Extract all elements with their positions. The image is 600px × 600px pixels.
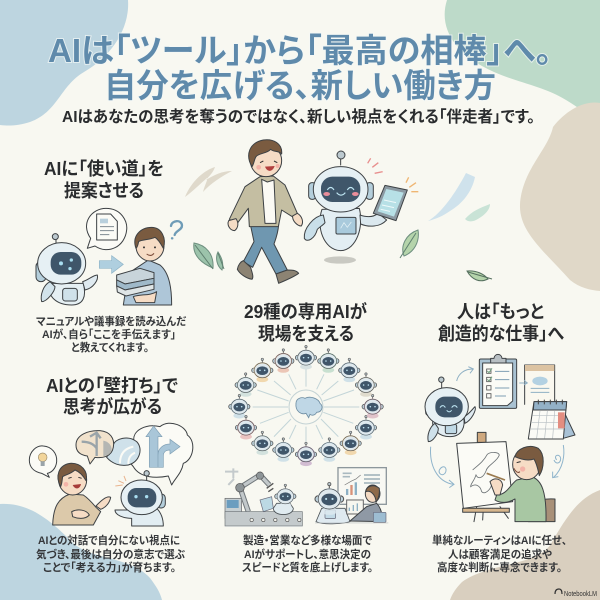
body text: 製造・営業など多様な場面で bbox=[243, 534, 372, 547]
hero: man walking with robot bbox=[228, 140, 418, 283]
man talking bbox=[53, 463, 111, 525]
leaf: left pair bbox=[194, 243, 224, 270]
speech bubble: document bbox=[87, 208, 127, 250]
heading bbox=[44, 159, 164, 201]
title: AIは「ツール」から「最高の相棒」へ。 bbox=[48, 32, 552, 69]
robot bbox=[425, 377, 475, 442]
heading: 提案させる bbox=[64, 180, 144, 201]
illustration bbox=[29, 423, 193, 526]
arrow bbox=[99, 256, 123, 273]
panel: 29 specialised AIs bbox=[225, 301, 388, 574]
calendar bbox=[528, 400, 575, 439]
body text bbox=[35, 315, 187, 354]
heading: AIに「使い道」を bbox=[44, 159, 164, 179]
hub and spoke diagram bbox=[229, 345, 383, 466]
window document bbox=[519, 365, 555, 404]
artist bbox=[487, 446, 555, 522]
blob: bottom right tan bbox=[450, 490, 600, 600]
panel: suggest uses bbox=[35, 159, 187, 354]
body text bbox=[242, 534, 373, 574]
heading: AIとの「壁打ち」で bbox=[46, 376, 178, 396]
brush stroke: blue bbox=[428, 173, 475, 221]
body text bbox=[36, 534, 185, 574]
body text: と教えてくれます。 bbox=[71, 341, 149, 354]
body text: AIが、自ら「ここを手伝えます」 bbox=[42, 328, 176, 341]
heading bbox=[438, 302, 564, 344]
illustration bbox=[225, 345, 388, 526]
body text: 高度な判断に専念できます。 bbox=[437, 561, 562, 574]
brush stroke: green bbox=[465, 204, 490, 221]
body text bbox=[432, 534, 567, 574]
panel: more creative work bbox=[425, 302, 575, 574]
panel: sounding board bbox=[29, 376, 193, 574]
thought cloud: diverging arrow bbox=[128, 423, 193, 485]
body text: スピードと質を底上げします。 bbox=[242, 561, 373, 574]
brush stroke: tan bbox=[185, 167, 232, 197]
illustration bbox=[425, 354, 575, 522]
heading bbox=[46, 376, 178, 417]
icon: question mark bbox=[171, 221, 182, 238]
body text: 単純なルーティンはAIに任せ、 bbox=[432, 534, 567, 547]
robot bbox=[36, 234, 98, 305]
heading: 29種の専用AIが bbox=[244, 301, 367, 322]
leaf: far right bbox=[467, 271, 492, 281]
easel bbox=[457, 432, 513, 522]
speech bubble: blue road bbox=[107, 438, 140, 465]
bubble: light bulb bbox=[29, 446, 57, 477]
body text: 気づき、最後は自分の意志で選ぶ bbox=[36, 548, 185, 561]
office robot and analyst bbox=[225, 468, 388, 526]
heading: 現場を支える bbox=[258, 324, 354, 344]
heading bbox=[244, 301, 367, 344]
body text: マニュアルや議事録を読み込んだ bbox=[35, 315, 187, 328]
heading: 人は「もっと bbox=[457, 302, 544, 322]
clipboard checklist bbox=[479, 354, 517, 408]
blob: bottom left blue bbox=[0, 504, 162, 600]
blob: top left blue bbox=[0, 0, 128, 126]
blob: top right green bbox=[445, 0, 600, 125]
title bbox=[48, 32, 552, 104]
factory robot arm bbox=[225, 468, 302, 526]
blob: right tan bbox=[520, 102, 600, 291]
body text: AIがサポートし、意思決定の bbox=[244, 548, 371, 561]
heading: 創造的な仕事」へ bbox=[438, 324, 564, 344]
man with documents bbox=[117, 227, 172, 305]
heading: 思考が広がる bbox=[63, 396, 162, 417]
title: 自分を広げる、新しい働き方 bbox=[104, 67, 496, 104]
robot bbox=[115, 471, 165, 526]
body text: 人は顧客満足の追求や bbox=[448, 548, 552, 561]
body text: ことで「考える力」が育ちます。 bbox=[43, 561, 176, 574]
subtitle: AIはあなたの思考を奪うのではなく、新しい視点をくれる「伴走者」です。 bbox=[62, 107, 535, 126]
speech bubble: tan road bbox=[76, 431, 114, 464]
flow arrow: robot to clipboard bbox=[457, 367, 473, 381]
icon: brain bbox=[296, 397, 322, 418]
illustration bbox=[36, 208, 182, 305]
leaf: centre right bbox=[400, 230, 418, 258]
body text: AIとの対話で自分にない視点に bbox=[38, 534, 180, 547]
NotebookLM credit bbox=[555, 589, 597, 598]
flow arrow: calendar to artist bbox=[553, 445, 564, 478]
man walking bbox=[228, 140, 303, 283]
flow arrow: robot to easel bbox=[431, 447, 454, 488]
robot with tablet bbox=[304, 151, 418, 264]
